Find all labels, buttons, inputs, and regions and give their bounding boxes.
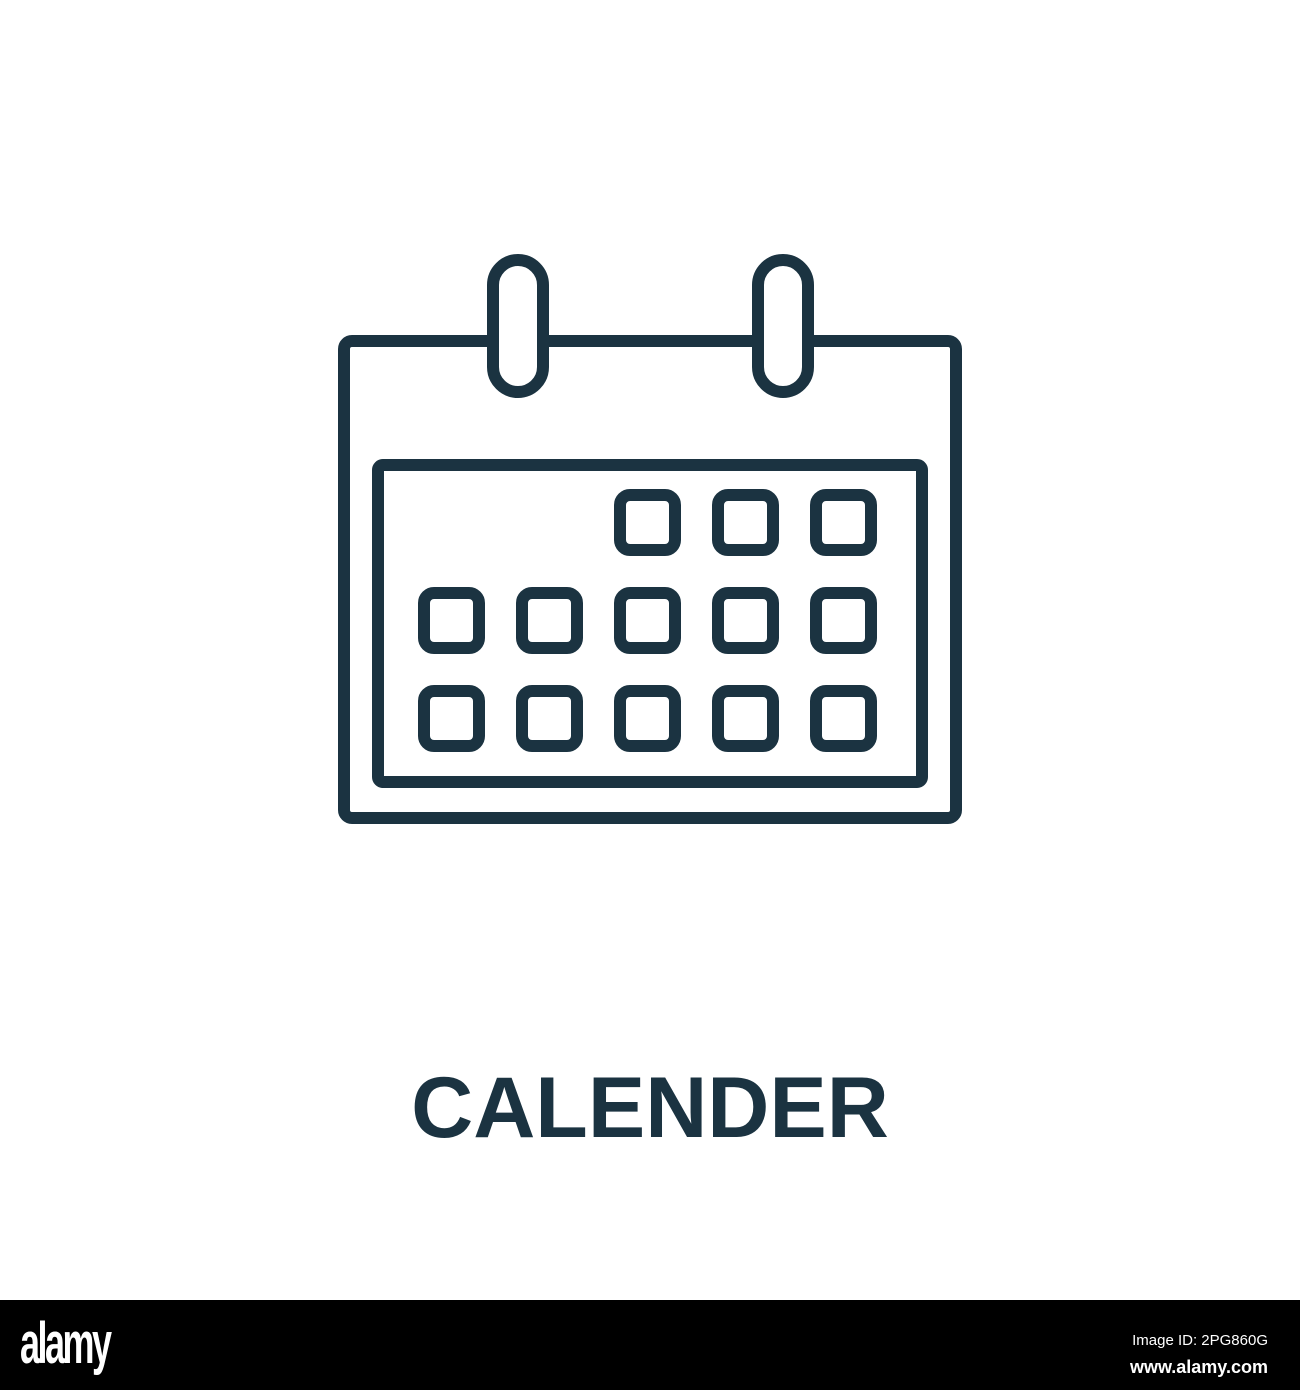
image id text — [1130, 1332, 1268, 1377]
title: CALENDER — [411, 1060, 889, 1156]
logo: alamy — [20, 1311, 110, 1376]
banner: footer — [0, 1300, 1300, 1390]
image id text: www.alamy.com — [1130, 1357, 1268, 1377]
icon: calendar — [338, 254, 962, 824]
image id text: Image ID: 2PG860G — [1132, 1332, 1268, 1349]
